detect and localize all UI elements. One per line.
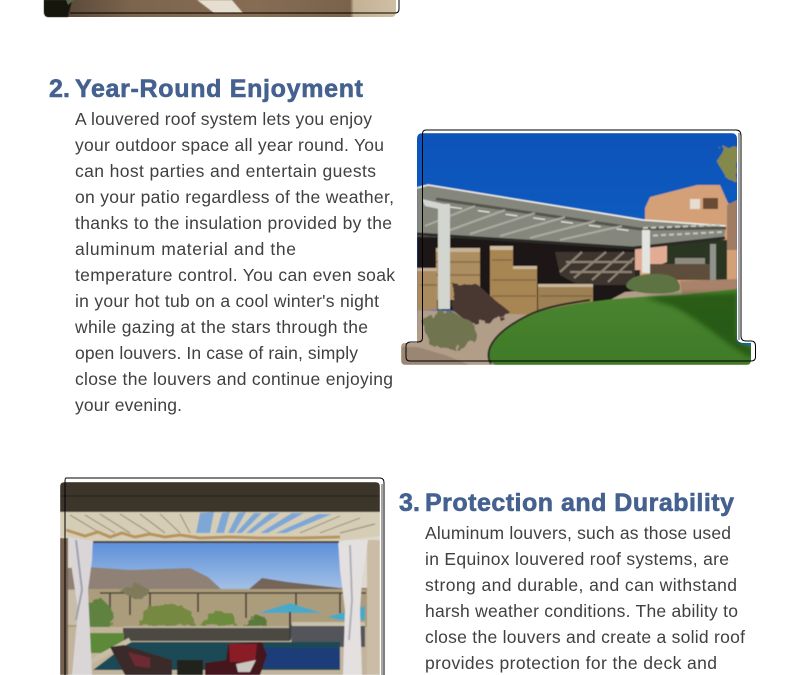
deck and pool surround xyxy=(68,627,368,675)
mountains xyxy=(68,567,222,590)
text block: year-round enjoyment description: temperature control. You can even soak xyxy=(75,265,395,285)
text block: protection and durability description: close the louvers and create a solid roof xyxy=(425,627,745,647)
shrubs xyxy=(626,274,680,294)
pergola roof xyxy=(417,185,726,247)
text block: protection and durability description: strong and durable, and can withstand xyxy=(425,575,737,595)
photo: previous section paver patio xyxy=(44,0,399,17)
stone walls xyxy=(417,270,437,310)
photo: louvered patio with pool and mountain view xyxy=(60,478,384,675)
back garden xyxy=(652,240,727,280)
dark under pergola xyxy=(417,238,635,310)
louvers xyxy=(60,512,380,541)
text block: protection and durability description: Aluminum louvers, such as those used xyxy=(425,523,731,543)
side wall xyxy=(60,538,68,675)
text block: year-round enjoyment description: while gazing at the stars through the xyxy=(74,317,368,337)
text block: year-round enjoyment description: your outdoor space all year round. You xyxy=(75,135,384,155)
text block: year-round enjoyment description: A louvered roof system lets you enjoy xyxy=(75,109,372,129)
text block: year-round enjoyment description: on your patio regardless of the weather, xyxy=(75,187,394,207)
text block: year-round enjoyment description: open louvers. In case of rain, simply xyxy=(75,343,358,363)
furniture xyxy=(110,645,172,675)
text block: protection and durability description: harsh weather conditions. The ability to xyxy=(425,601,738,621)
heading: Year-Round Enjoyment: 2. xyxy=(49,75,70,103)
text block: year-round enjoyment description: in your hot tub on a cool winter's night xyxy=(75,291,379,311)
text block: year-round enjoyment description: can host parties and entertain guests xyxy=(75,161,376,181)
text block: year-round enjoyment description: your evening. xyxy=(75,395,182,415)
building xyxy=(640,185,737,295)
columns xyxy=(438,204,450,309)
heading: Protection and Durability: Protection and Durability xyxy=(425,489,734,517)
text block: year-round enjoyment description: aluminum material and the xyxy=(75,239,296,259)
text block: year-round enjoyment description: thanks to the insulation provided by the xyxy=(75,213,392,233)
beam xyxy=(60,482,380,513)
desert and fence xyxy=(68,589,368,629)
curtains xyxy=(68,535,93,675)
text block: protection and durability description: in Equinox louvered roof systems, are xyxy=(425,549,729,569)
heading: Year-Round Enjoyment: Year-Round Enjoyment xyxy=(75,75,364,103)
ground and path xyxy=(401,288,686,365)
umbrellas xyxy=(258,603,322,613)
text block: protection and durability description: provides protection for the deck and xyxy=(425,653,717,673)
photo: pergola over lawn with stone walls xyxy=(401,130,756,365)
text block: year-round enjoyment description: close the louvers and continue enjoying xyxy=(75,369,393,389)
heading: Protection and Durability: 3. xyxy=(399,489,420,517)
